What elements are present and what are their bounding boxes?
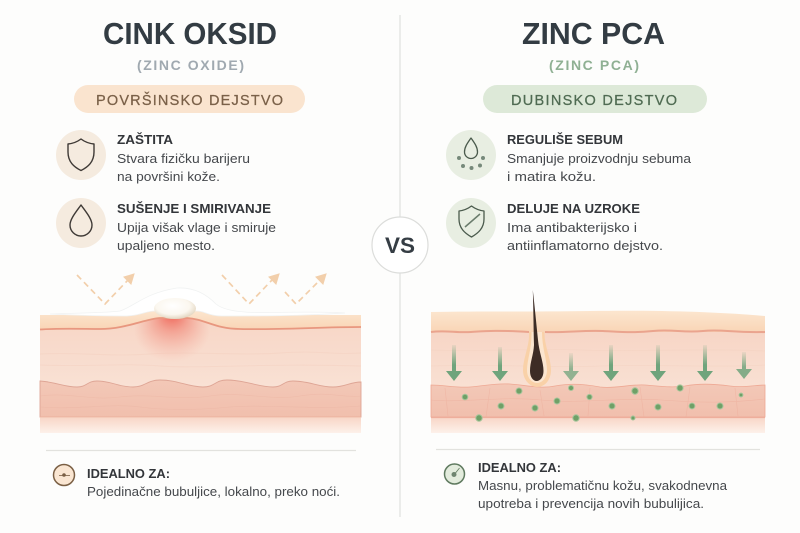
bottom fade: [431, 417, 765, 433]
lower texture: [431, 387, 765, 417]
badge: dubinsko dejstvo: [483, 85, 707, 113]
text: idealno za: Pojedinačne bubuljice, lokalno, preko noći.: [87, 484, 340, 499]
center divider: [399, 15, 401, 517]
text: zaštita: [117, 132, 250, 184]
green arrows: [446, 345, 752, 381]
lower skin layer: [431, 384, 765, 417]
subtitle: zinc pca: (ZINC PCA): [549, 57, 639, 73]
text: zaštita: Stvara fizičku barijeru: [117, 151, 250, 166]
text: deluje na uzroke: Ima antibakterijsko i: [507, 220, 637, 235]
text: deluje na uzroke: antiinflamatorno dejstvo.: [507, 238, 663, 253]
epidermis line: [431, 330, 765, 332]
cream film: [50, 288, 345, 316]
text: zaštita: na površini kože.: [117, 169, 220, 184]
text: sušenje i smirivanje: [117, 201, 276, 253]
lower skin layer: [40, 380, 361, 417]
epidermis line: [40, 318, 361, 330]
icon: shield: [56, 130, 106, 180]
icon: target: [444, 464, 464, 484]
text: idealno za: IDEALNO ZA:: [87, 466, 170, 481]
epidermis: [40, 310, 361, 329]
text: reguliše sebum: [507, 132, 692, 184]
arrows: reflected dashed: [77, 274, 326, 304]
icon: target pimple: [54, 464, 74, 486]
dermis texture: [431, 349, 765, 367]
text: sušenje i smirivanje: Upija višak vlage i smiruje: [117, 220, 276, 235]
subtitle: zinc oxide: (ZINC OXIDE): [137, 57, 244, 73]
badge: površinsko dejstvo: [74, 85, 305, 113]
VS badge: [372, 217, 428, 273]
text: deluje na uzroke: DELUJE NA UZROKE: [507, 201, 640, 216]
text: sušenje i smirivanje: upaljeno mesto.: [117, 238, 215, 253]
illustration: skin with pimple: [40, 288, 361, 433]
text: sušenje i smirivanje: SUŠENJE I SMIRIVANJE: [117, 201, 271, 216]
icon: shield with slash: [446, 198, 496, 248]
pimple dome: [154, 298, 196, 319]
separator: [46, 450, 356, 452]
VS badge: VS: [385, 233, 415, 258]
dermis texture: [40, 352, 361, 367]
lower texture: [40, 394, 361, 410]
text: idealno za: upotreba i prevencija novih bubulijica.: [478, 496, 704, 511]
icon: drop: [56, 198, 106, 248]
bottom fade: [40, 417, 361, 433]
text: idealno za: [478, 460, 728, 511]
follicle sheath: [523, 332, 551, 387]
title: cink oksid: CINK OKSID: [103, 16, 277, 51]
redness: [134, 298, 210, 362]
text: zaštita: ZAŠTITA: [117, 132, 174, 147]
illustration: skin with follicle: [431, 290, 765, 433]
badge: dubinsko dejstvo: DUBINSKO DEJSTVO: [511, 93, 677, 109]
text: idealno za: Masnu, problematičnu kožu, svakodnevna: [478, 478, 728, 493]
separator: [436, 448, 760, 450]
text: idealno za: IDEALNO ZA:: [478, 460, 561, 475]
hair: [530, 290, 544, 381]
text: deluje na uzroke: [507, 201, 663, 253]
text: idealno za: [87, 466, 340, 499]
badge: površinsko dejstvo: POVRŠINSKO DEJSTVO: [96, 92, 283, 109]
title: zinc pca: ZINC PCA: [522, 16, 665, 51]
text: reguliše sebum: REGULIŠE SEBUM: [507, 132, 623, 147]
icon: sebum drop: [446, 130, 496, 180]
panel: cink oksid: [40, 16, 361, 499]
text: reguliše sebum: i matira kožu.: [507, 169, 596, 184]
epidermis: [431, 311, 765, 332]
panel: zinc pca: [431, 16, 765, 511]
text: reguliše sebum: Smanjuje proizvodnju sebuma: [507, 151, 692, 166]
zinc particles: [462, 385, 743, 421]
